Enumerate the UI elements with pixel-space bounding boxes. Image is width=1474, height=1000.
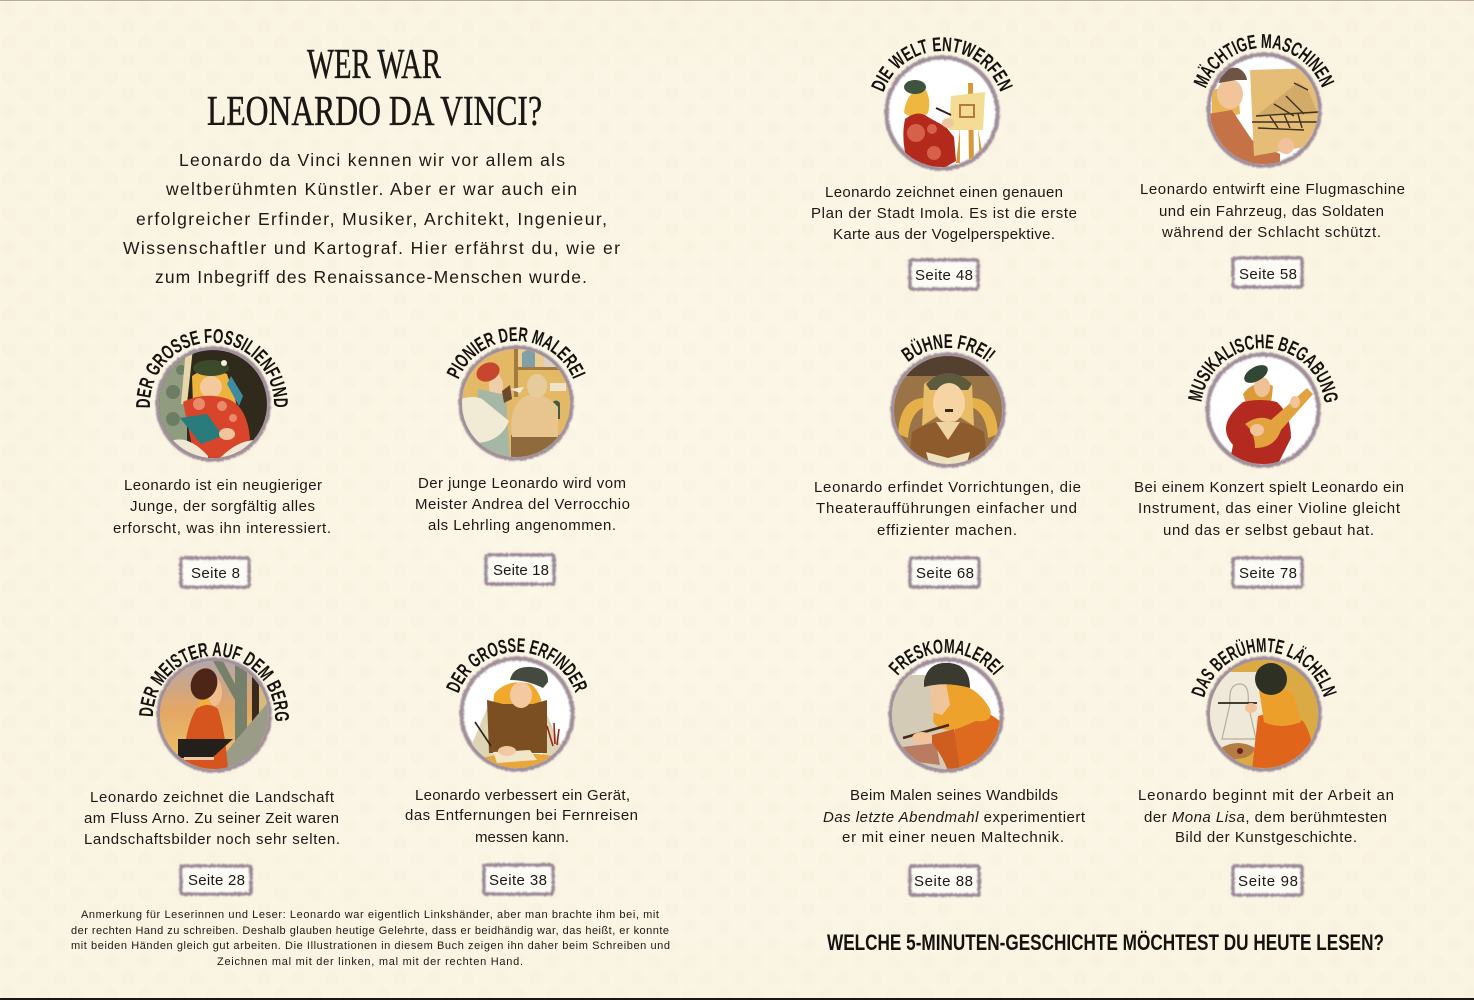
intro text: [123, 150, 620, 287]
page badge: [181, 558, 249, 587]
description: Leonardo entwirft eine Flugmaschine: [1140, 181, 1405, 198]
description: Leonardo zeichnet die Landschaft: [90, 789, 335, 806]
description: [415, 475, 630, 534]
portrait: Leonardo reading: [157, 348, 269, 460]
page badge: Seite 98: [1238, 873, 1298, 890]
description: Beim Malen seines Wandbilds: [850, 787, 1058, 804]
description: Leonardo beginnt mit der Arbeit an: [1138, 787, 1394, 804]
description: Bei einem Konzert spielt Leonardo ein: [1134, 479, 1404, 496]
panel: Musikalische Begabung: [1134, 334, 1404, 590]
panel: Der Meister auf dem Berg: [84, 642, 340, 898]
heading: Freskomalerei: FRESKOMALEREI: [888, 639, 1004, 676]
page badge: Seite 78: [1239, 565, 1297, 582]
heading: Pionier der Malerei: PIONIER DER MALEREI: [446, 327, 586, 379]
portrait: Leonardo at easel: [886, 58, 998, 169]
footnote: Anmerkung für Leserinnen und Leser: Leonardo war eigentlich Linkshänder, aber man brachte ihm bei, mit: [81, 909, 659, 921]
footnote: Zeichnen mal mit der linken, mal mit der rechten Hand.: [217, 956, 523, 968]
description: Leonardo ist ein neugieriger: [124, 477, 322, 494]
description: effizienter machen.: [877, 522, 1017, 539]
description: messen kann.: [475, 829, 569, 846]
intro text: zum Inbegriff des Renaissance-Menschen wurde.: [155, 267, 587, 287]
page badge: Seite 68: [916, 565, 974, 582]
page badge: [181, 866, 251, 894]
panel: Pionier der Malerei: [415, 327, 630, 588]
description: [405, 787, 638, 846]
page badge: Seite 18: [493, 562, 549, 579]
portrait: Leonardo with violin: [1208, 354, 1318, 466]
description: Theateraufführungen einfacher und: [816, 500, 1077, 517]
description: Das letzte Abendmahl experimentiert: [823, 809, 1086, 826]
description: Junge, der sorgfältig alles: [130, 498, 315, 515]
portrait: Leonardo painting Mona Lisa: [1208, 658, 1320, 770]
page badge: [910, 866, 979, 895]
description: [1138, 787, 1394, 846]
description: Leonardo erfindet Vorrichtungen, die: [814, 479, 1081, 496]
portrait: Leonardo painting fresco: [890, 660, 1002, 771]
footnote: der rechten Hand zu schreiben. Deshalb glauben heutige Gelehrte, dass er beidhändig war, das heißt, er konnte: [71, 925, 669, 937]
description: und ein Fahrzeug, das Soldaten: [1159, 203, 1384, 220]
portrait: Leonardo in theatre: [892, 354, 1004, 466]
description: [1134, 479, 1404, 539]
panel: Der grosse Fossilienfund: [113, 328, 331, 590]
page badge: Seite 28: [188, 872, 245, 889]
description: der Mona Lisa, dem berühmtesten: [1144, 809, 1387, 826]
description: Landschaftsbilder noch sehr selten.: [84, 831, 340, 848]
description: Leonardo zeichnet einen genauen: [825, 184, 1063, 201]
heading: Der grosse Fossilienfund: DER GROSSE FOSSILIENFUND: [136, 328, 288, 408]
description: Karte aus der Vogelperspektive.: [833, 226, 1055, 243]
description: als Lehrling angenommen.: [428, 517, 616, 534]
portrait: apprentice and bust: [460, 347, 572, 459]
heading: Musikalische Begabung: MUSIKALISCHE BEGABUNG: [1188, 334, 1338, 402]
panel: Mächtige Maschinen: [1140, 34, 1405, 290]
panel: Freskomalerei: [823, 639, 1086, 898]
page badge: [910, 260, 978, 289]
portrait: Leonardo at desk: [462, 658, 572, 770]
title: LEONARDO DA VINCI?: [207, 89, 542, 135]
panel: Das berühmte Lächeln: [1138, 638, 1394, 898]
intro text: weltberühmten Künstler. Aber er war auch ein: [165, 179, 577, 199]
description: [1140, 181, 1405, 241]
description: das Entfernungen bei Fernreisen: [405, 807, 638, 824]
heading: Der grosse Erfinder: DER GROSSE ERFINDER: [446, 638, 587, 694]
page badge: [1233, 258, 1302, 287]
intro text: Leonardo da Vinci kennen wir vor allem als: [179, 150, 565, 170]
description: er mit einer neuen Maltechnik.: [842, 829, 1064, 846]
page badge: [910, 558, 979, 587]
page badge: Seite 58: [1239, 266, 1297, 283]
description: Leonardo verbessert ein Gerät,: [415, 787, 630, 804]
heading: Die Welt entwerfen: DIE WELT ENTWERFEN: [871, 37, 1013, 92]
description: [814, 479, 1081, 539]
intro text: erfolgreicher Erfinder, Musiker, Architekt, Ingenieur,: [136, 209, 607, 229]
page badge: Seite 48: [915, 267, 973, 284]
heading: Bühne frei!: BÜHNE FREI!: [900, 334, 996, 362]
panel: Bühne frei!: [814, 334, 1081, 590]
description: Meister Andrea del Verrocchio: [415, 496, 630, 513]
page badge: Seite 38: [489, 872, 547, 889]
description: und das er selbst gebaut hat.: [1163, 522, 1374, 539]
page badge: [484, 865, 553, 894]
page badge: [486, 555, 554, 584]
portrait: Leonardo in landscape: [158, 659, 270, 771]
description: Instrument, das einer Violine gleicht: [1138, 500, 1401, 517]
page badge: Seite 8: [191, 565, 240, 582]
heading: Mächtige Maschinen: MÄCHTIGE MASCHINEN: [1193, 34, 1334, 88]
description: Plan der Stadt Imola. Es ist die erste: [811, 205, 1077, 222]
page badge: [1233, 866, 1302, 895]
description: [113, 477, 331, 537]
heading: Der Meister auf dem Berg: DER MEISTER AUF DEM BERG: [139, 642, 289, 721]
intro text: Wissenschaftler und Kartograf. Hier erfährst du, wie er: [123, 238, 620, 258]
description: [84, 789, 340, 848]
page badge: Seite 88: [914, 873, 973, 890]
heading: Das berühmte Lächeln: DAS BERÜHMTE LÄCHELN: [1191, 638, 1337, 698]
footnote: mit beiden Händen gleich gut arbeiten. Die Illustrationen in diesem Buch zeigen ihn daher beim Schreiben und: [71, 940, 670, 952]
description: erforscht, was ihn interessiert.: [113, 520, 331, 537]
description: [811, 184, 1077, 243]
portrait: flying machine sketch: [1208, 54, 1320, 166]
description: Der junge Leonardo wird vom: [418, 475, 626, 492]
panel: Die Welt entwerfen: [811, 37, 1077, 292]
footnote: [71, 909, 670, 968]
title: WER WAR: [307, 42, 441, 88]
panel: Der grosse Erfinder: [405, 638, 638, 898]
title: [207, 42, 542, 135]
description: [823, 787, 1086, 846]
description: während der Schlacht schützt.: [1161, 224, 1381, 241]
page badge: [1233, 558, 1302, 587]
description: am Fluss Arno. Zu seiner Zeit waren: [84, 810, 339, 827]
description: Bild der Kunstgeschichte.: [1175, 829, 1357, 846]
